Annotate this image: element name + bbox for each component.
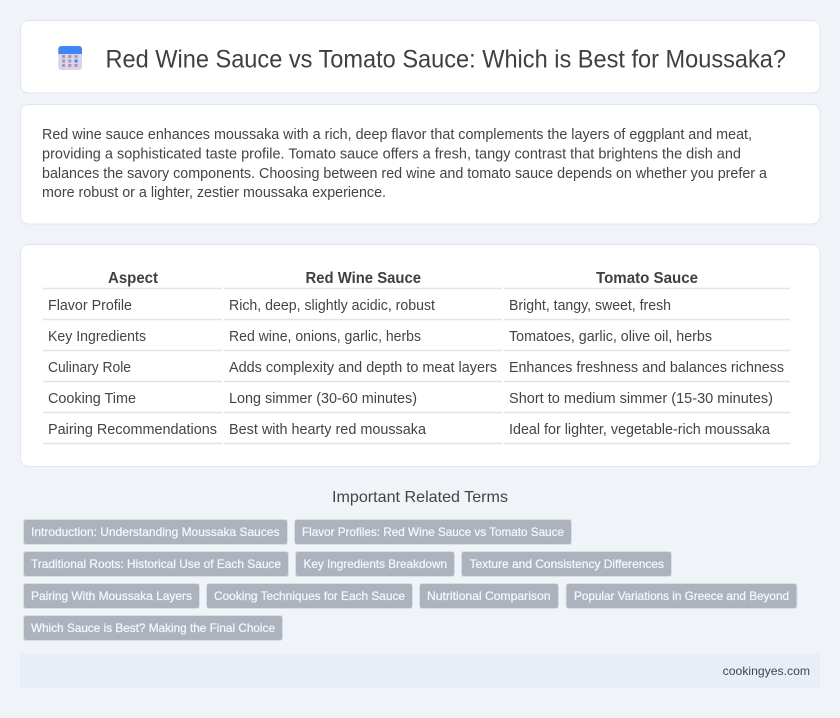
table row: pairing recommendations: Pairing Recommendations — [48, 422, 217, 438]
table row: cooking time: Short to medium simmer (15-30 minutes) — [509, 391, 773, 407]
title: Red Wine Sauce vs Tomato Sauce: Which is Best for Moussaka? — [106, 45, 786, 73]
text block: introduction paragraph: balances the savory components. Choosing between red wine and tomato sauce depends on whether you prefer a — [42, 166, 767, 182]
table row: cooking time: Cooking Time — [48, 391, 136, 407]
panel: comparison table — [20, 244, 820, 466]
tag: pairing: Pairing With Moussaka Layers — [31, 589, 192, 603]
icon: calendar — [58, 46, 82, 70]
panel: introduction — [20, 104, 820, 224]
table row: culinary role: Adds complexity and depth to meat layers — [229, 360, 497, 376]
table row: culinary role: Enhances freshness and balances richness — [509, 360, 784, 376]
table row: flavor profile: Rich, deep, slightly acidic, robust — [229, 298, 435, 314]
tag: pairing — [24, 584, 200, 608]
table row: culinary role: Culinary Role — [48, 360, 131, 376]
table row: cooking time: Long simmer (30-60 minutes) — [229, 391, 417, 407]
table row: pairing recommendations: Best with hearty red moussaka — [229, 422, 426, 438]
tag: nutritional comparison: Nutritional Comparison — [427, 589, 550, 603]
tag: nutritional comparison — [420, 584, 558, 608]
table header: Aspect — [108, 270, 159, 287]
tag: which sauce is best — [24, 616, 282, 640]
table row: pairing recommendations — [43, 422, 790, 444]
tag: which sauce is best: Which Sauce is Best? Making the Final Choice — [31, 621, 275, 635]
table row: cooking time — [43, 391, 790, 412]
tag: flavor profiles — [294, 520, 572, 544]
text block: introduction paragraph — [42, 127, 767, 201]
table row: flavor profile: Flavor Profile — [48, 298, 132, 314]
tag: texture: Texture and Consistency Differences — [470, 557, 664, 571]
table header — [43, 270, 790, 288]
related term tags — [24, 520, 797, 640]
table row: flavor profile — [43, 298, 790, 320]
footer — [20, 654, 820, 688]
tag: introduction: Introduction: Understanding Moussaka Sauces — [31, 525, 280, 539]
tag: popular variations: Popular Variations in Greece and Beyond — [574, 589, 789, 603]
table row: key ingredients: Key Ingredients — [48, 329, 146, 345]
text block: introduction paragraph: providing a sophisticated taste profile. Tomato sauce offers a fresh, tangy contrast that brightens the dish and — [42, 146, 741, 162]
table header: Red Wine Sauce — [306, 270, 421, 287]
panel: title — [20, 20, 820, 93]
tag: traditional roots: Traditional Roots: Historical Use of Each Sauce — [31, 557, 281, 571]
tag: cooking techniques — [206, 584, 412, 608]
text block: introduction paragraph: Red wine sauce enhances moussaka with a rich, deep flavor that complements the layers of eggplant and meat, — [42, 127, 752, 143]
footer source text: cookingyes.com — [723, 664, 810, 678]
table row: key ingredients: Tomatoes, garlic, olive oil, herbs — [509, 329, 712, 345]
table row: culinary role — [43, 360, 790, 382]
tag: flavor profiles: Flavor Profiles: Red Wine Sauce vs Tomato Sauce — [302, 525, 564, 539]
table row: flavor profile: Bright, tangy, sweet, fresh — [509, 298, 671, 314]
table row: key ingredients: Red wine, onions, garlic, herbs — [229, 329, 421, 345]
table row: key ingredients — [43, 329, 790, 350]
table header: Tomato Sauce — [596, 270, 698, 287]
tag: traditional roots — [24, 552, 288, 576]
tag: key ingredients — [296, 552, 454, 576]
tag: key ingredients: Key Ingredients Breakdown — [304, 557, 447, 571]
tag: popular variations — [566, 584, 797, 608]
tag: introduction — [24, 520, 288, 544]
tag: texture — [462, 552, 672, 576]
heading: important related terms: Important Related Terms — [332, 489, 508, 506]
table row: pairing recommendations: Ideal for lighter, vegetable-rich moussaka — [509, 422, 770, 438]
tag: cooking techniques: Cooking Techniques for Each Sauce — [214, 589, 405, 603]
text block: introduction paragraph: more robust or a lighter, zestier moussaka experience. — [42, 185, 386, 201]
